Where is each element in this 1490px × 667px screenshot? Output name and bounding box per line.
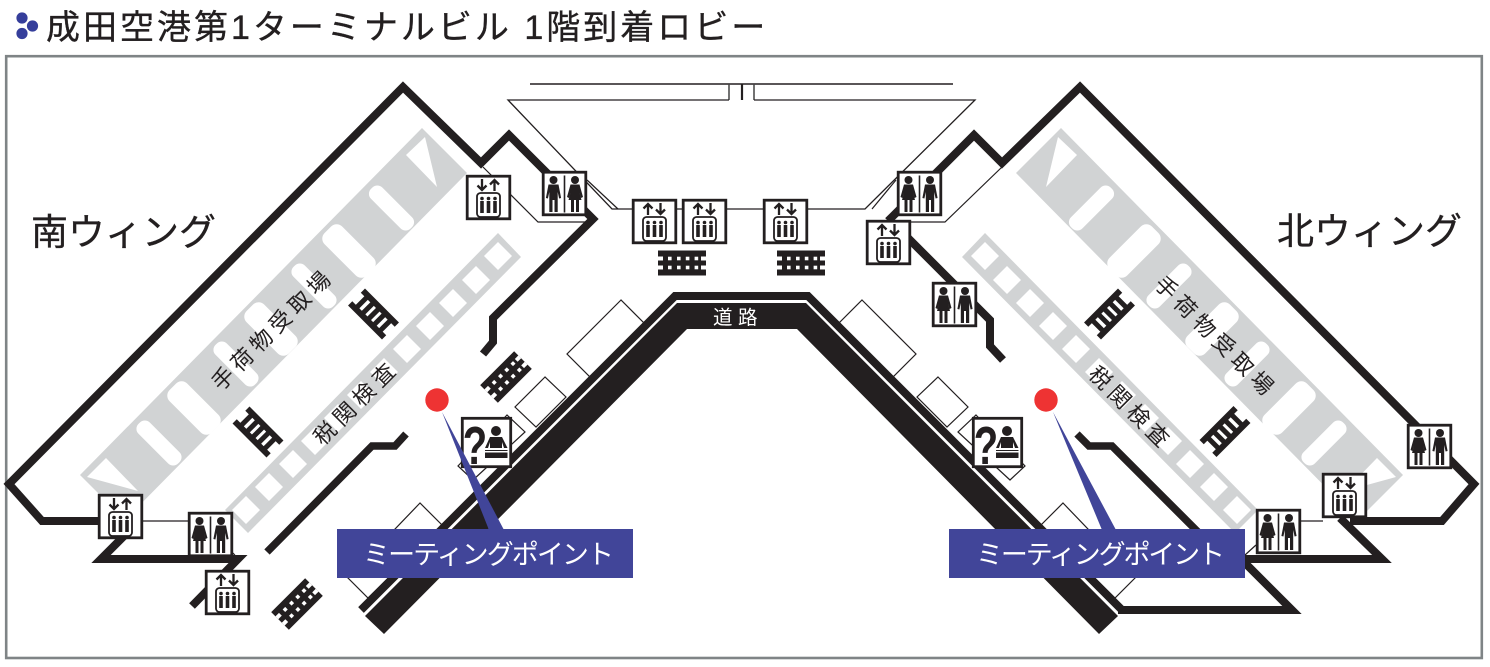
escalator: south lower bbox=[271, 578, 323, 630]
stairs: north upper bbox=[1084, 289, 1135, 339]
annex boxes along the road bbox=[348, 300, 1135, 598]
escalator: centre right bbox=[777, 250, 825, 276]
callout: north meeting point: ミーティングポイント bbox=[976, 540, 1225, 570]
icon: information desk north: ? bbox=[974, 416, 998, 477]
icon: restroom north bottom bbox=[1257, 510, 1300, 553]
panel: south wing customs band bbox=[225, 233, 521, 533]
north wing connector wall bbox=[900, 230, 1003, 360]
marker: north meeting point bbox=[1034, 388, 1058, 412]
icon: restroom south top bbox=[543, 172, 586, 215]
icon: information desk north bbox=[973, 416, 1022, 477]
callout pointer: south meeting point bbox=[442, 412, 504, 530]
escalator: south upper bbox=[480, 351, 532, 403]
title bullet: three blue dots bbox=[16, 12, 38, 39]
icon: elevator centre 1 bbox=[633, 200, 676, 243]
label: south baggage claim: 手荷物受取場 bbox=[207, 263, 339, 395]
panel: north wing customs band bbox=[962, 233, 1258, 533]
road label: 道路 bbox=[713, 307, 763, 329]
icon: information desk south: ? bbox=[463, 416, 487, 477]
label: north baggage claim: 手荷物受取場 bbox=[1150, 271, 1282, 403]
escalator: centre left bbox=[658, 250, 706, 276]
marker: south meeting point bbox=[425, 388, 449, 412]
icon: elevator centre 2 bbox=[683, 200, 726, 243]
icon: elevator north bottom right bbox=[1323, 474, 1366, 517]
wing label: north: 北ウィング bbox=[1277, 211, 1462, 252]
callout: south meeting point bbox=[337, 529, 633, 578]
stairs: north lower bbox=[1200, 406, 1250, 457]
north wing outer wall bbox=[888, 87, 1474, 521]
icon: restroom north top bbox=[898, 172, 941, 215]
south wing lower walls bbox=[101, 535, 238, 606]
north wing inner wall bbox=[1077, 434, 1225, 559]
icon: information desk south bbox=[462, 416, 511, 477]
icon: elevator centre 3 bbox=[764, 200, 807, 243]
panel: north wing baggage claim band bbox=[1016, 128, 1403, 520]
south wing outer wall bbox=[9, 87, 593, 521]
callout pointer: north meeting point bbox=[1053, 412, 1116, 530]
label: north customs: 税関検査 bbox=[1084, 361, 1178, 455]
panel: south wing baggage claim band bbox=[80, 128, 467, 520]
wing label: south: 南ウィング bbox=[31, 212, 216, 253]
callout: south meeting point: ミーティングポイント bbox=[363, 540, 614, 570]
icon: elevator south bottom bbox=[206, 571, 249, 614]
callout: north meeting point bbox=[949, 529, 1245, 578]
stairs: south upper bbox=[348, 289, 399, 339]
title: 成田空港第1ターミナルビル 1階到着ロビー bbox=[46, 9, 768, 47]
icon: restroom north middle bbox=[933, 283, 976, 326]
north wing lower walls bbox=[1118, 518, 1382, 610]
icon: elevator north top bbox=[867, 221, 910, 264]
stairs: south lower bbox=[233, 407, 283, 457]
road: wall and carriageway bbox=[361, 296, 1122, 634]
south wing inner wall bbox=[267, 434, 406, 552]
label: south customs: 税関検査 bbox=[309, 355, 404, 450]
icon: elevator south bottom left bbox=[99, 495, 142, 538]
thin building outlines: upper concourse and connectors bbox=[143, 84, 1323, 559]
icon: restroom north far right bbox=[1408, 425, 1451, 468]
icon: elevator south top bbox=[467, 176, 510, 219]
icon: restroom south bottom bbox=[189, 513, 232, 556]
